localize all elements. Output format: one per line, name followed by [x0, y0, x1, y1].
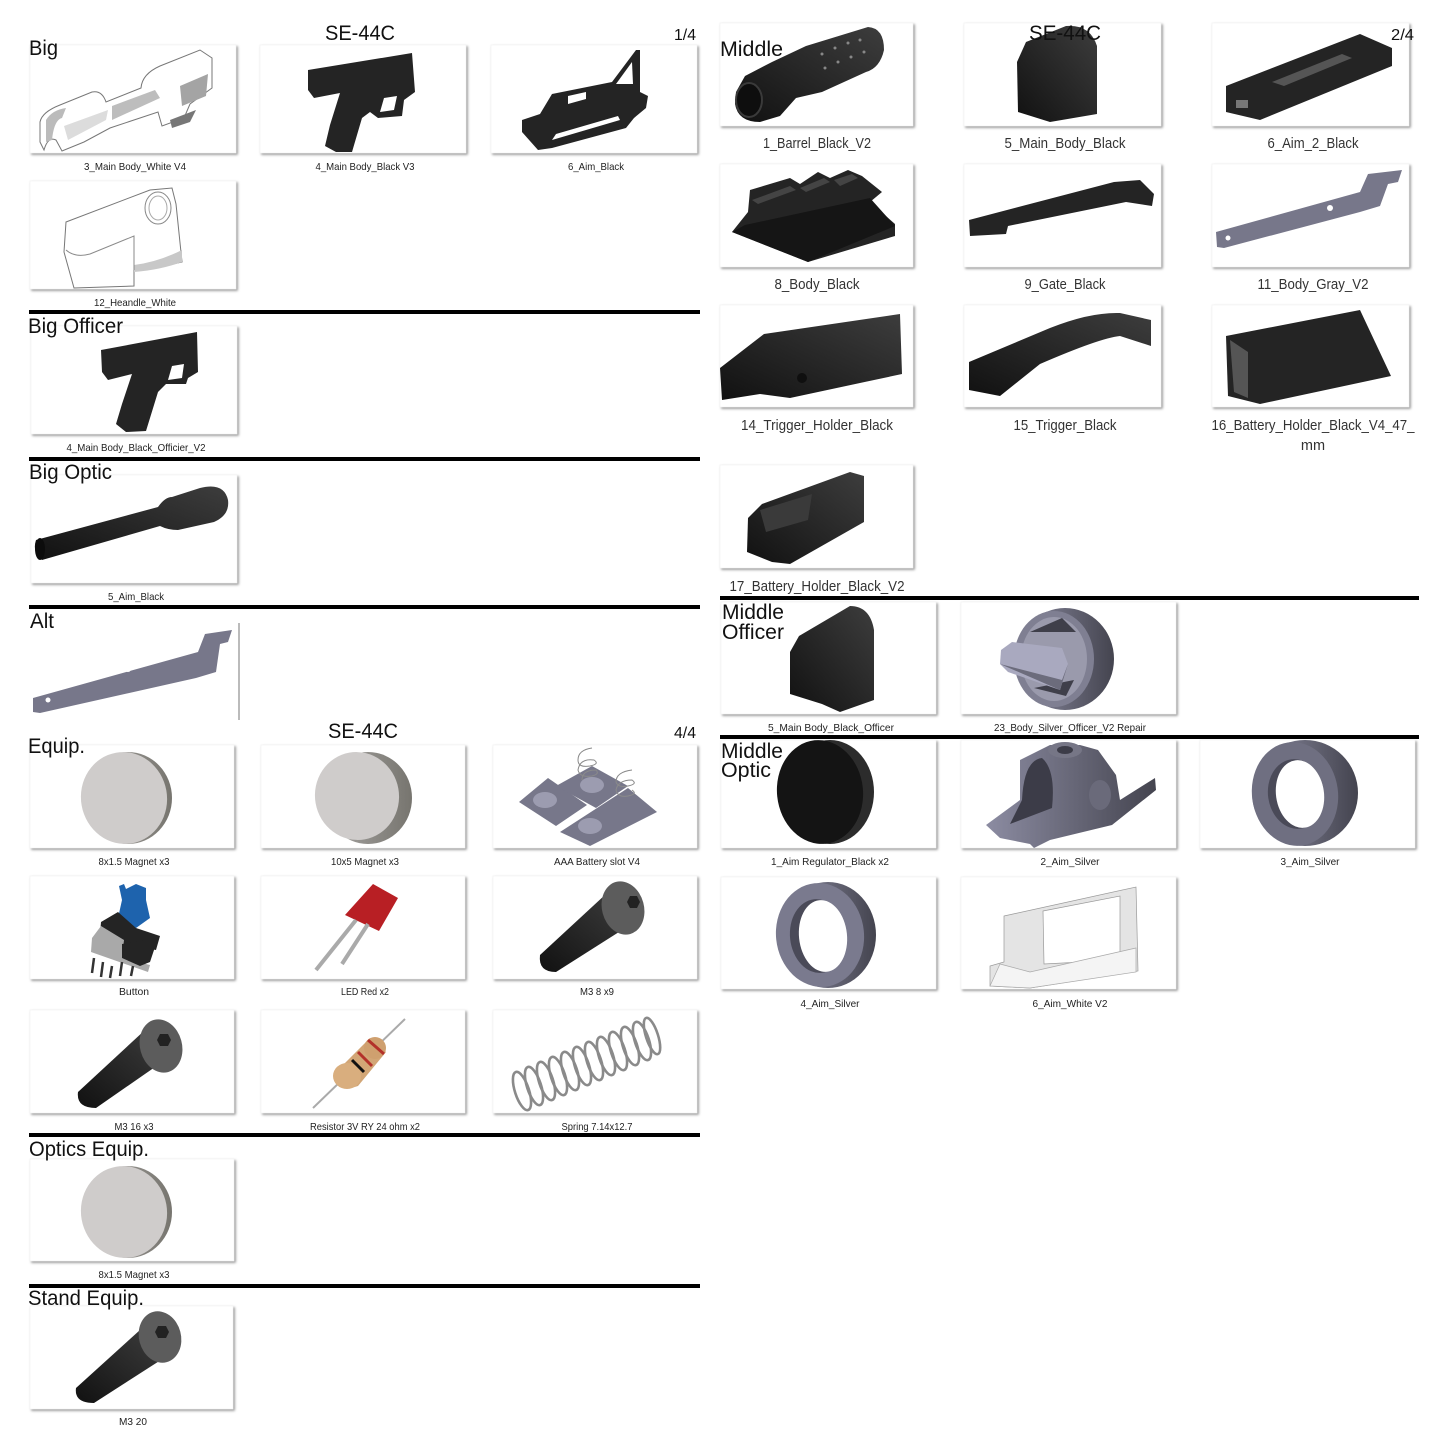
panel: Big Officer — [28, 315, 237, 454]
part: 17_Battery_Holder_Black_V2 — [720, 465, 913, 568]
part: M3 8 x9 — [493, 876, 697, 979]
sheet 4/4: title: SE-44C — [328, 720, 398, 743]
captions: 2_Aim_Silver — [1040, 856, 1100, 868]
sheet 2/4: title: SE-44C — [1029, 22, 1101, 45]
heading: Middle Optic: Middle — [721, 740, 783, 763]
captions: 16_Battery_Holder_Black_V4_47_ — [1212, 418, 1415, 434]
captions: 8_Body_Black — [774, 277, 860, 293]
part: 1_Barrel_Black_V2 — [720, 23, 913, 126]
captions: M3 8 x9 — [580, 986, 614, 998]
caption: 4_Main Body_Black_Officier_V2 — [66, 442, 206, 454]
panel: Middle Officer — [721, 601, 1176, 734]
part: 3_Main Body_White V4 — [30, 45, 236, 153]
sheet 2/4: page number: 2/4 — [1391, 27, 1414, 44]
part: M3 16 x3 — [30, 1010, 234, 1113]
part: 1_Aim Regulator_Black — [721, 736, 936, 848]
captions: 6_Aim_2_Black — [1268, 136, 1359, 152]
captions: Spring 7.14x12.7 — [562, 1121, 633, 1133]
part: Button — [30, 876, 234, 979]
captions: 8x1.5 Magnet x3 — [98, 856, 170, 868]
part: 8x1.5 Magnet — [30, 1159, 234, 1265]
part: 4_Main Body_Black V3 — [260, 45, 466, 153]
part: LED Red — [261, 876, 465, 979]
captions: 10x5 Magnet x3 — [331, 856, 399, 868]
heading: Optics Equip.: Optics Equip. — [29, 1138, 149, 1161]
part: 2_Aim_Silver — [961, 740, 1176, 848]
heading: Middle: Middle — [720, 38, 783, 61]
part: AAA Battery slot V4 — [493, 745, 697, 848]
part: 14_Trigger_Holder_Black — [720, 305, 913, 407]
part: 4_Main Body_Black_Officier_V2 — [31, 326, 237, 434]
heading: Big Officer: Big Officer — [28, 315, 123, 338]
part: Spring — [493, 1010, 697, 1113]
part: 12_Heandle_White — [30, 181, 236, 289]
part: 3_Aim_Silver — [1200, 737, 1415, 851]
captions: 15_Trigger_Black — [1014, 418, 1117, 434]
captions: 23_Body_Silver_Officer_V2 Repair — [994, 722, 1146, 734]
captions: LED Red x2 — [341, 986, 389, 998]
part: 11_Body_Gray_V2 — [1212, 164, 1409, 267]
heading: Middle Officer: Officer — [722, 621, 784, 644]
caption: 5_Aim_Black — [108, 591, 165, 603]
heading: Equip.: Equip. — [28, 735, 85, 758]
panel: Alt — [30, 610, 240, 720]
part: M3 20 — [30, 1306, 233, 1409]
part: 5_Main_Body_Black — [964, 23, 1161, 126]
part: 6_Aim_White V2 — [961, 877, 1176, 989]
sheet 1/4: title: SE-44C — [325, 22, 395, 45]
part: 23_Body_Silver_Officer_V2 Repair — [961, 602, 1176, 714]
part: 16_Battery_Holder_Black_V4_47_mm — [1212, 305, 1409, 407]
captions: 9_Gate_Black — [1024, 277, 1106, 293]
part: Resistor — [261, 1010, 465, 1113]
part: 5_Aim_Black — [31, 475, 237, 583]
panel: Stand Equip. — [28, 1287, 233, 1428]
captions: 14_Trigger_Holder_Black — [741, 418, 894, 434]
part: 5_Main Body_Black_Officer — [721, 602, 936, 714]
caption group: 12_Heandle_White — [94, 297, 176, 309]
part: 4_Aim_Silver — [721, 877, 936, 991]
captions: 1_Barrel_Black_V2 — [763, 136, 871, 152]
captions: 5_Main Body_Black_Officer — [768, 722, 894, 734]
captions: mm — [1301, 438, 1325, 454]
part: alt body gray — [32, 623, 240, 720]
caption group: 3_Main Body_White V4 — [84, 161, 186, 173]
part: 6_Aim_Black — [491, 45, 697, 153]
part: 6_Aim_2_Black — [1212, 23, 1409, 126]
heading: Middle Optic — [721, 740, 783, 782]
part: 15_Trigger_Black — [964, 305, 1161, 407]
caption group — [84, 161, 625, 309]
panel: Middle Optic — [721, 736, 1415, 1010]
captions: Resistor 3V RY 24 ohm x2 — [310, 1121, 420, 1133]
caption: M3 20 — [119, 1416, 147, 1428]
panel: Equip. — [28, 735, 697, 1133]
caption group: 4_Main Body_Black V3 — [316, 161, 415, 173]
caption: 8x1.5 Magnet x3 — [98, 1269, 170, 1281]
captions: 6_Aim_White V2 — [1032, 998, 1108, 1010]
part: 10x5 Magnet — [261, 745, 465, 848]
part: 9_Gate_Black — [964, 164, 1161, 267]
heading: Alt: Alt — [30, 610, 54, 633]
captions — [768, 722, 1146, 734]
captions — [771, 856, 1340, 1010]
part: 8x1.5 Magnet — [30, 745, 234, 851]
captions: Button — [119, 986, 149, 998]
captions — [730, 136, 1415, 595]
heading: Middle Officer: Middle — [722, 601, 784, 624]
panel: Big Optic — [29, 461, 237, 603]
captions: M3 16 x3 — [114, 1121, 154, 1133]
heading: Stand Equip.: Stand Equip. — [28, 1287, 144, 1310]
captions: 17_Battery_Holder_Black_V2 — [730, 579, 904, 595]
captions: 1_Aim Regulator_Black x2 — [771, 856, 889, 868]
captions: 11_Body_Gray_V2 — [1258, 277, 1368, 293]
heading: Middle Officer — [722, 601, 784, 644]
heading: Middle Optic: Optic — [721, 759, 771, 782]
caption group: 6_Aim_Black — [568, 161, 625, 173]
sheet 1/4: page number: 1/4 — [674, 27, 696, 44]
heading: Big: Big — [29, 37, 58, 60]
panel: Optics Equip. — [29, 1138, 234, 1281]
captions: AAA Battery slot V4 — [554, 856, 640, 868]
part: 8_Body_Black — [720, 164, 913, 267]
captions: 3_Aim_Silver — [1280, 856, 1340, 868]
sheet 2/4 panel: Middle — [720, 22, 1415, 595]
panel: Big — [29, 37, 697, 309]
sheet 4/4: page number: 4/4 — [674, 725, 696, 742]
captions: 5_Main_Body_Black — [1004, 136, 1126, 152]
captions: 4_Aim_Silver — [800, 998, 860, 1010]
heading: Big Optic: Big Optic — [29, 461, 112, 484]
captions — [98, 856, 640, 1133]
